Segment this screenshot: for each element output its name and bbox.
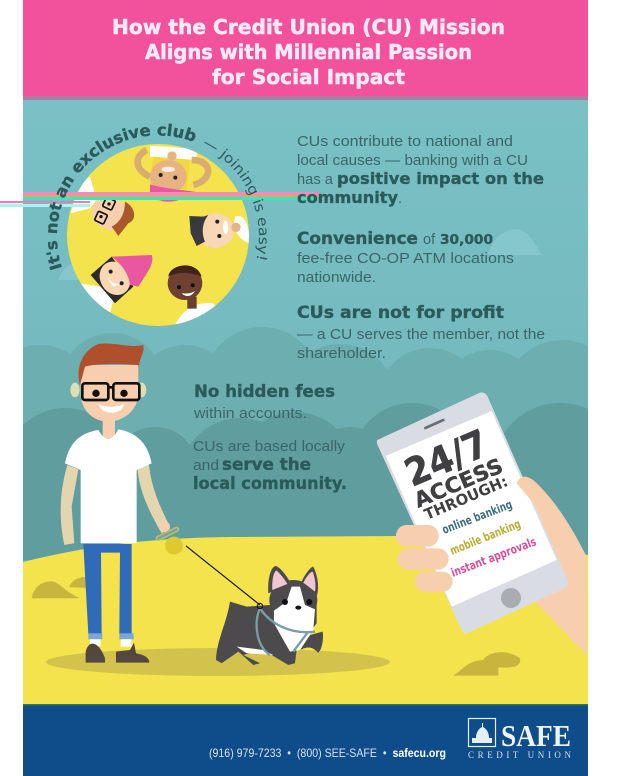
thumb <box>517 477 568 537</box>
circle of friends <box>67 144 249 327</box>
phone text: 24/7 <box>398 421 495 495</box>
speaker <box>425 420 443 428</box>
mounds left <box>32 577 90 598</box>
text block: not for profit: — a CU serves the member, not the <box>297 327 545 343</box>
home button <box>501 588 521 608</box>
head <box>70 343 146 422</box>
text block: convenience <box>297 229 514 286</box>
arm <box>517 477 587 655</box>
background scene <box>23 100 588 704</box>
curved headline: — joining is easy! <box>204 142 267 260</box>
text block: community impact: community <box>297 188 399 207</box>
text block: community impact: . <box>398 191 402 207</box>
shoes <box>86 643 149 663</box>
title: for Social Impact <box>212 65 405 89</box>
friend: dark hair <box>189 213 249 248</box>
contact line: (916) 979-7233 • (800) SEE-SAFE • safecu.org <box>209 746 446 760</box>
text block: convenience: 30,000 <box>440 233 493 248</box>
text block: serve local: serve the <box>222 455 311 475</box>
friend: blonde at top <box>138 146 208 202</box>
text block: serve local: CUs are based locally <box>193 439 346 455</box>
text block: convenience: of <box>423 232 436 248</box>
text block: convenience: nationwide. <box>297 270 376 286</box>
text block: no hidden fees <box>193 382 335 422</box>
title: How the Credit Union (CU) Mission <box>112 15 505 39</box>
phone text: instant approvals <box>449 534 538 580</box>
phone text: online banking <box>440 497 514 537</box>
text block: not for profit: shareholder. <box>297 346 386 362</box>
text block: not for profit <box>297 303 545 362</box>
title <box>112 15 505 89</box>
curved headline: It's not an exclusive club <box>46 124 196 270</box>
phone text: THROUGH: <box>422 472 510 524</box>
text block: community impact: CUs contribute to national and <box>297 134 513 150</box>
text block: community impact: positive impact on the <box>337 169 544 188</box>
logo: SAFE <box>501 718 571 753</box>
ground shadow <box>46 648 390 676</box>
leash handle <box>158 529 260 605</box>
text block: no hidden fees: No hidden fees <box>194 382 335 402</box>
jeans <box>83 544 132 634</box>
curved headline <box>46 124 267 270</box>
back hills <box>23 327 588 444</box>
title: Aligns with Millennial Passion <box>145 40 472 64</box>
mounds right <box>452 652 520 676</box>
text block: community impact: has a <box>297 172 334 188</box>
phone text: ACCESS <box>411 454 506 513</box>
phone body <box>377 392 568 633</box>
phone in hand <box>377 392 587 655</box>
text block: community impact <box>297 134 544 207</box>
scan glitch stripes <box>0 192 320 207</box>
clouds <box>58 229 542 280</box>
text block: no hidden fees: within accounts. <box>193 406 307 422</box>
friend: glasses <box>71 177 134 236</box>
text block: not for profit: CUs are not for profit <box>297 303 504 323</box>
phone text: mobile banking <box>448 517 523 558</box>
text block: community impact: local causes — banking with a CU <box>297 153 528 169</box>
person with leash <box>32 343 323 665</box>
header panel <box>23 0 588 100</box>
text block: serve local <box>193 439 347 494</box>
footer band <box>23 704 588 776</box>
dog <box>216 566 323 665</box>
t-shirt <box>65 429 152 543</box>
front hills <box>5 403 627 560</box>
phone text <box>398 421 538 580</box>
logo <box>468 718 572 760</box>
screen <box>386 411 557 607</box>
friend: dark skin <box>168 265 215 324</box>
text block: convenience: Convenience <box>297 229 418 249</box>
arms <box>61 465 170 545</box>
text block: serve local: and <box>193 458 219 474</box>
fingers <box>396 525 453 592</box>
friend: pink beanie <box>80 255 152 313</box>
text block: serve local: local community. <box>193 474 347 494</box>
text block: convenience: fee-free CO-OP ATM locations <box>297 251 514 267</box>
logo: CREDIT UNION <box>468 750 572 760</box>
ground <box>23 536 588 706</box>
neck <box>103 418 115 438</box>
